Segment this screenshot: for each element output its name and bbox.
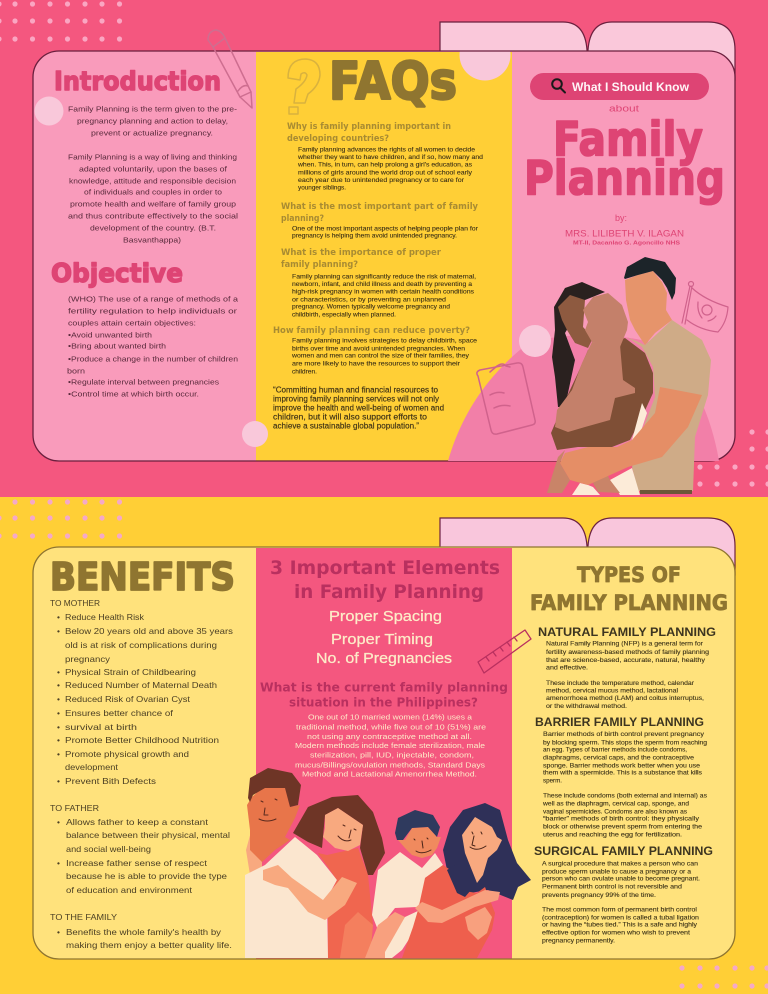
heading: FAQs: FAQs xyxy=(329,52,457,112)
list: to mother: Reduced Number of Maternal Death xyxy=(65,680,217,690)
answer 4: births over time and avoid unintended pregnancies. When xyxy=(292,346,465,352)
father hair xyxy=(248,768,301,807)
text block: objective: •Bring about wanted birth xyxy=(68,342,166,350)
list: to father xyxy=(50,803,230,895)
text block: natural: method, cervical mucus method, lactational xyxy=(546,688,678,694)
panel: cover xyxy=(524,73,728,495)
list: to the family: making them enjoy a better quality life. xyxy=(66,940,232,950)
icon: clipboard xyxy=(477,363,535,434)
father face details xyxy=(259,799,277,821)
list: to mother: Promote physical growth and xyxy=(65,749,189,759)
text block: barrier: by blocking sperm. This stops the sperm from reaching xyxy=(543,740,708,746)
list: to father: • xyxy=(57,858,60,868)
list: to the family: Benefits the whole family's health by xyxy=(66,927,222,937)
man torso xyxy=(627,320,711,491)
baby head xyxy=(583,293,628,347)
list: to mother: • xyxy=(57,612,60,622)
father head xyxy=(247,787,300,862)
man hair xyxy=(624,257,676,300)
answer 4: women and men can control the size of their families, they xyxy=(291,352,470,360)
text block: barrier: them with a spermicide. This is a substance that kills xyxy=(543,770,702,776)
list: to mother: Below 20 years old and above 35 years xyxy=(65,626,233,636)
dot pattern: bottom page bottom right xyxy=(679,965,768,989)
text block: surgical: person who can ovulate unable to become pregnant. xyxy=(542,876,700,882)
answer 1: when. This, in turn, can help prolong a girl's education, as xyxy=(297,162,473,168)
mother hair xyxy=(443,803,531,900)
illustration: piggyback family xyxy=(245,768,531,958)
text block: surgical xyxy=(542,860,700,944)
answer 1: Family planning advances the rights of all women to decide xyxy=(298,146,475,154)
panel: types of family planning xyxy=(530,563,728,944)
text block: barrier: block or otherwise prevent sperm from entering the xyxy=(543,824,703,830)
decorative pale circles xyxy=(242,30,510,447)
answer 2: pregnancy is helping them avoid unintended pregnancy. xyxy=(292,232,457,240)
mother hand xyxy=(465,907,492,940)
text block: surgical: Permanent birth control is not reversible and xyxy=(542,884,683,890)
answer 4: are more likely to have the resources to support their xyxy=(292,360,461,368)
text block: natural: fertility awareness-based methods of family planning xyxy=(546,649,710,656)
text block: Philippines situation: traditional method, while five out of 10 (51%) are xyxy=(296,722,486,732)
list: to mother: old is at risk of complications during xyxy=(65,640,217,650)
heading: 3 important elements xyxy=(270,557,500,603)
text block: introduction: Family Planning is a way of living and thinking xyxy=(68,152,237,162)
girl face xyxy=(323,808,363,851)
panel: introduction and objective xyxy=(34,30,252,398)
text block: natural: or the withdrawal method. xyxy=(546,703,627,710)
cream garment left xyxy=(572,483,600,495)
list: to mother: • xyxy=(57,667,60,677)
man arm xyxy=(560,387,702,485)
text block: Philippines situation: Modern methods include female sterilization, male xyxy=(295,741,485,750)
list: to mother: TO MOTHER xyxy=(50,598,100,608)
boy leg xyxy=(365,912,405,958)
quote: “Committing human and financial resources to xyxy=(273,386,439,394)
list: to mother: Ensures better chance of xyxy=(65,708,174,718)
pale circle beside introduction xyxy=(34,96,64,126)
text block: barrier: sponge. Barrier methods work better when you use xyxy=(543,762,701,770)
text block: objective: fertility regulation to help individuals or xyxy=(68,306,238,316)
text block: introduction: adapted voluntarily, upon the bases of xyxy=(79,164,228,174)
list: to father: because he is able to provide the type xyxy=(66,871,227,881)
text block: introduction: and thus contribute effectively to the social xyxy=(68,212,238,220)
list: to mother xyxy=(50,598,233,786)
answer 2: One of the most important aspects of helping people plan for xyxy=(292,226,479,232)
icon: question mark xyxy=(288,59,320,114)
icon: pencil xyxy=(208,30,252,108)
text block: natural: and effective. xyxy=(546,664,588,672)
mother face and neck xyxy=(462,817,502,883)
text block: barrier: sperm. xyxy=(543,778,562,784)
folder tabs: top page xyxy=(440,22,735,80)
answer 1: younger siblings. xyxy=(298,184,346,192)
text block: introduction: pregnancy planning and action to delay, xyxy=(77,116,228,126)
text block: objective: (WHO) The use of a range of methods of a xyxy=(68,294,239,304)
list: to father: • xyxy=(57,817,60,827)
quote: improving family planning services will not only xyxy=(273,394,439,404)
heading: Philippines situation: situation in the Philippines? xyxy=(289,694,478,710)
text block: Philippines situation: One out of 10 married women (14%) uses a xyxy=(308,712,473,722)
list: to mother: • xyxy=(57,776,60,786)
panel: benefits xyxy=(50,555,235,950)
text block: objective: •Avoid unwanted birth xyxy=(68,330,152,340)
panel: pink middle column xyxy=(256,548,512,959)
answer 1: millions of girls around the world drop out of school early xyxy=(298,170,473,176)
quote xyxy=(273,386,444,430)
heading: types of family planning: TYPES OF xyxy=(577,563,681,587)
text block: surgical: produce sperm unable to cause a pregnancy or a xyxy=(542,868,692,876)
answer 3: high-risk pregnancy in women with certain health conditions xyxy=(292,288,475,296)
list: to father: balance between their physical, mental xyxy=(66,830,230,840)
text block: barrier: vaginal spermicides. Condoms are also known as xyxy=(543,808,687,816)
list: to father: of education and environment xyxy=(66,885,193,895)
answer 3: pregnancy. Women typically welcome pregnancy and xyxy=(292,304,450,310)
background: yellow bottom page xyxy=(0,497,768,994)
list: to father: and social well-being xyxy=(66,844,151,854)
question 2 xyxy=(281,202,478,224)
text block: introduction: promote health and welfare of family group xyxy=(70,200,236,208)
text block: barrier: Barrier methods of birth control prevent pregnancy xyxy=(543,731,705,738)
icon: flag xyxy=(682,282,728,332)
text block: Philippines situation: not using any contraceptive method at all. xyxy=(307,732,472,741)
quote: achieve a sustainable global population.” xyxy=(273,422,419,430)
woman face xyxy=(558,295,593,348)
panel: bottom page folder xyxy=(33,547,735,959)
answer 1: whether they want to have children, and if so, how many and xyxy=(297,154,483,161)
text block: barrier xyxy=(542,731,708,838)
woman hair xyxy=(552,282,605,407)
woman body xyxy=(551,338,653,450)
text block: objective: couples attain certain objectives: xyxy=(68,318,196,328)
title: Family Planning: Family xyxy=(553,112,703,168)
text block: Philippines situation: mucus/Billings/ovulation methods, Standard Days xyxy=(295,760,485,770)
answer 4: children. xyxy=(292,368,317,376)
panel: FAQ yellow column xyxy=(256,52,512,461)
subtitle: about: about xyxy=(609,104,640,114)
question 1: Why is family planning important in xyxy=(287,122,451,132)
search pill xyxy=(530,73,709,100)
text block: introduction: Family Planning is the term given to the pre- xyxy=(68,104,238,114)
byline xyxy=(565,213,684,246)
text block: Philippines situation: sterilization, pill, IUD, injectable, condom, xyxy=(310,750,474,760)
list: to mother: Reduce Health Risk xyxy=(65,612,145,622)
mother hair lock xyxy=(447,857,477,897)
mother face details xyxy=(470,832,486,849)
text block: objective: •Control time at which birth occur. xyxy=(68,390,199,398)
list: to mother: Reduced Risk of Ovarian Cyst xyxy=(65,694,191,704)
baby leg xyxy=(593,470,620,493)
answer 3: newborn, infant, and child illness and death by preventing a xyxy=(292,281,472,288)
text block: barrier: well as the diaphragm, cervical cap, sponge, and xyxy=(542,800,690,808)
boy face details xyxy=(414,838,431,853)
heading: Philippines situation xyxy=(260,680,508,710)
panel border xyxy=(33,547,735,959)
heading: 3 important elements: in Family Planning xyxy=(294,581,484,603)
text block: objective: •Produce a change in the number of children xyxy=(68,354,238,364)
heading: types of family planning: FAMILY PLANNING xyxy=(530,591,728,615)
question 1 xyxy=(287,122,451,144)
quote: improve the health and well-being of women and xyxy=(273,404,444,412)
answer 3: childbirth, especially when planned. xyxy=(292,312,396,318)
text block: barrier: These include condoms (both external and internal) as xyxy=(543,792,707,800)
text block: objective xyxy=(67,294,239,398)
question 3: family planning? xyxy=(281,260,358,270)
text block: introduction: knowledge, attitude and responsible decision xyxy=(69,176,236,186)
text block: barrier: diaphragms, cervical caps, and the contraceptive xyxy=(543,754,695,762)
list: to mother: • xyxy=(57,680,60,690)
text block: surgical: pregnancy permanently. xyxy=(542,938,615,944)
background: pink top page xyxy=(0,0,768,497)
illustration: family with baby xyxy=(547,257,711,495)
question 3 xyxy=(281,248,442,270)
woman leg xyxy=(547,450,570,493)
man head and neck xyxy=(625,271,672,345)
list: to mother: Physical Strain of Childbearing xyxy=(65,667,196,677)
text block: objective: •Regulate interval between pregnancies xyxy=(68,378,219,386)
text block: Philippines situation xyxy=(295,712,486,778)
text block: objective: born xyxy=(67,366,85,376)
text block: barrier: “barrier” methods of birth control: they physically xyxy=(543,816,700,822)
boy shirt xyxy=(372,852,443,930)
dot pattern: bottom page top left xyxy=(0,499,122,539)
text block: natural xyxy=(546,640,710,710)
question 4: How family planning can reduce poverty? xyxy=(273,326,470,336)
heading: BENEFITS: BENEFITS xyxy=(50,555,235,599)
subheading: natural: NATURAL FAMILY PLANNING xyxy=(538,625,716,639)
answer 3: or characteristics, or by preventing an unplanned xyxy=(292,296,446,304)
heading: Philippines situation: What is the current family planning xyxy=(260,680,508,694)
panel: important elements xyxy=(245,557,531,958)
icon: ruler xyxy=(478,630,531,673)
hill shape behind the cover illustration xyxy=(448,335,719,461)
text block: Philippines situation: Method and Lactational Amenorrhea Method. xyxy=(302,770,477,778)
girl hair xyxy=(293,795,385,875)
baby body xyxy=(555,342,635,432)
father shirt xyxy=(245,837,337,958)
heading: 3 important elements: 3 Important Elements xyxy=(270,557,500,579)
girl arm xyxy=(263,865,357,920)
text block: barrier: an egg. Types of barrier methods include condoms, xyxy=(543,746,687,754)
panel: FAQs xyxy=(273,52,535,434)
list: to mother: Prevent Bith Defects xyxy=(65,776,156,786)
title: Family Planning xyxy=(524,112,725,206)
list: to the family xyxy=(50,912,232,950)
dot pattern: top left xyxy=(0,1,122,42)
answer 3 xyxy=(292,274,476,318)
list: three elements: Proper Timing xyxy=(331,632,433,648)
answer 1 xyxy=(297,146,483,192)
heading: Introduction: Introduction xyxy=(54,67,221,97)
question 2: What is the most important part of family xyxy=(281,202,478,212)
text block: introduction: development of the country. (B.T. xyxy=(90,224,216,232)
title: Family Planning: Planning xyxy=(524,152,725,206)
list: to mother: • xyxy=(57,735,60,745)
white side strip xyxy=(632,403,647,440)
list: to father: Allows father to keep a constant xyxy=(66,817,209,827)
question 1: developing countries? xyxy=(287,134,389,144)
answer 2 xyxy=(292,226,479,240)
list: to mother: • xyxy=(57,749,60,759)
byline: by: xyxy=(615,213,627,223)
text block: introduction xyxy=(68,104,238,244)
list: to mother: pregnancy xyxy=(65,654,111,664)
boy head xyxy=(398,827,441,858)
heading: types of family planning xyxy=(530,563,728,615)
list: three elements: No. of Pregnancies xyxy=(316,651,452,667)
girl face details xyxy=(338,825,356,841)
mother shirt xyxy=(402,865,495,958)
boy hair xyxy=(395,810,440,840)
boy sock xyxy=(385,910,420,958)
panel: top page folder xyxy=(33,30,735,461)
text block: natural: that are science-based, accurate, natural, healthy xyxy=(546,657,706,664)
list: to mother: • xyxy=(57,694,60,704)
quote: children, but it will also support efforts to xyxy=(273,412,428,422)
cream garment right xyxy=(610,468,640,495)
white waistband xyxy=(580,449,602,455)
list: to father: Increase father sense of respect xyxy=(66,858,208,868)
list: to mother: survival at birth xyxy=(65,722,137,732)
subheading: barrier: BARRIER FAMILY PLANNING xyxy=(535,715,704,729)
byline: MT-II, Dacanlao G. Agoncillo NHS xyxy=(573,240,680,246)
subheading: surgical: SURGICAL FAMILY PLANNING xyxy=(534,844,713,858)
text block: introduction: Basvanthappa) xyxy=(123,236,182,244)
list: three elements: Proper Spacing xyxy=(329,609,442,625)
list: to the family: • xyxy=(57,927,60,937)
text block: introduction: of individuals and couples in order to xyxy=(84,188,222,196)
text block: natural: amenorrhoea method (LAM) and coitus interruptus, xyxy=(546,695,704,702)
list: to mother: • xyxy=(57,708,60,718)
icon: magnifying glass xyxy=(552,79,565,92)
text block: natural: Natural Family Planning (NFP) is a general term for xyxy=(546,640,703,648)
search pill: What I Should Know xyxy=(572,80,690,94)
heading: Objective: Objective xyxy=(51,259,183,289)
list: to mother: Promote Better Childhood Nutrition xyxy=(65,735,219,745)
list: three elements xyxy=(316,609,452,667)
text block: surgical: effective option for women who wish to prevent xyxy=(542,930,690,936)
dot pattern: top page bottom right xyxy=(697,429,768,487)
list: to mother: development xyxy=(65,762,119,772)
panel border xyxy=(33,51,735,461)
text block: introduction: prevent or actualize pregnancy. xyxy=(91,128,213,138)
text block: surgical: The most common form of permanent birth control xyxy=(542,906,697,914)
question 3: What is the importance of proper xyxy=(281,248,442,258)
girl leg xyxy=(340,912,373,958)
text block: surgical: or having the “tubes tied.” This is a safe and highly xyxy=(542,922,698,928)
answer 3: Family planning can significantly reduce the risk of maternal, xyxy=(292,274,476,280)
man trousers xyxy=(640,490,692,494)
question 2: planning? xyxy=(281,214,324,224)
pale circle near the couple xyxy=(519,325,551,357)
list: to father: TO FATHER xyxy=(50,803,99,813)
text block: surgical: prevents pregnancy 99% of the time. xyxy=(542,892,656,899)
text block: barrier: uterus and reaching the egg for fertilization. xyxy=(543,832,682,838)
answer 4: Family planning involves strategies to delay childbirth, space xyxy=(292,338,477,344)
answer 1: each year due to unintended pregnancy or to care for xyxy=(298,177,465,184)
list: to mother: • xyxy=(57,722,60,732)
byline: MRS. LILIBETH V. ILAGAN xyxy=(565,228,684,240)
folder tabs: bottom page xyxy=(440,518,735,575)
answer 4 xyxy=(291,338,477,376)
list: to mother: • xyxy=(57,626,60,636)
text block: surgical: (contraception) for women is called a tubal ligation xyxy=(542,914,700,922)
boy arm xyxy=(415,890,500,923)
girl shirt xyxy=(318,848,373,958)
text block: natural: These include the temperature method, calendar xyxy=(546,680,694,687)
text block: surgical: A surgical procedure that makes a person who can xyxy=(542,860,699,868)
list: to the family: TO THE FAMILY xyxy=(50,912,117,922)
girl hand behind father's neck xyxy=(246,828,262,880)
